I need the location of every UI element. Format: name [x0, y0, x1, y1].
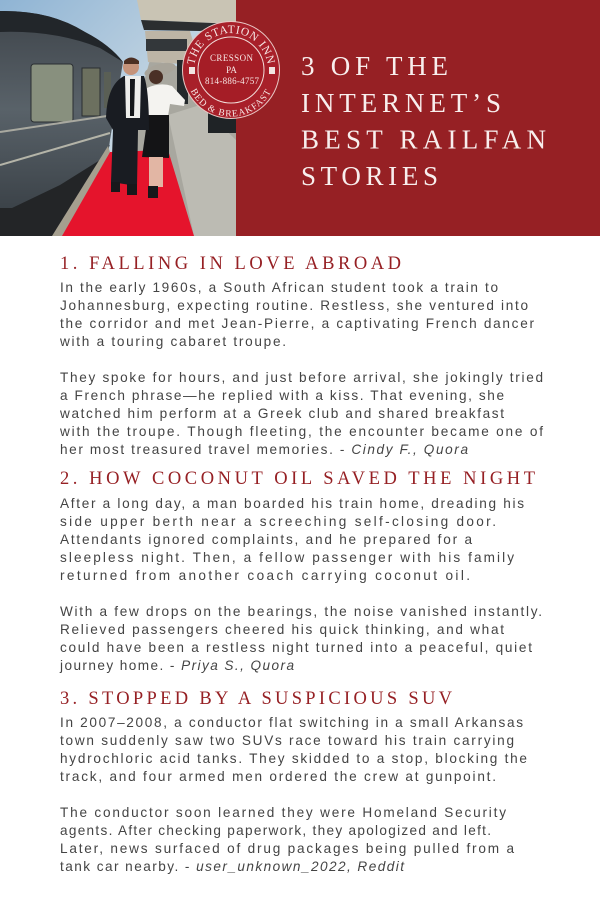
logo seal: The Station Inn [182, 21, 280, 119]
story 1 text: a French phrase—he replied with a kiss. That evening, she [60, 388, 504, 403]
story 2 text: sleepless night. Then, a fellow passenger with his family [60, 550, 514, 565]
platform edge [52, 146, 110, 236]
logo seal: The Station Inn: PA [226, 65, 237, 75]
story 2 heading: 2. HOW COCONUT OIL SAVED THE NIGHT [60, 469, 535, 489]
platform [100, 60, 236, 236]
logo seal: The Station Inn: CRESSON [210, 53, 254, 63]
story 3 text: tank car nearby. - user_unknown_2022, Reddit [60, 859, 405, 874]
train car [0, 11, 123, 208]
story 3 heading: 3. STOPPED BY A SUSPICIOUS SUV [60, 689, 453, 709]
header panel [236, 0, 600, 236]
story 3 text: In 2007–2008, a conductor flat switching in a small Arkansas [60, 715, 523, 730]
red carpet [62, 150, 194, 236]
story 1 heading: 1. FALLING IN LOVE ABROAD [60, 254, 401, 274]
train stripes [0, 116, 107, 132]
story 1 text: They spoke for hours, and just before arrival, she jokingly tried [60, 370, 543, 385]
man [106, 58, 149, 195]
story 1 text: Johannesburg, expecting routine. Restless, she ventured into [60, 298, 528, 313]
story 1 text: with the troupe. Though fleeting, the encounter became one of [59, 424, 543, 439]
title: INTERNET’S [301, 88, 501, 118]
story 2 text [59, 496, 542, 673]
story 2 text: With a few drops on the bearings, the noise vanished instantly. [60, 604, 542, 619]
story 1 text: her most treasured travel memories. - Cindy F., Quora [60, 442, 468, 457]
sky [0, 0, 236, 236]
canopy [137, 0, 236, 24]
story 3 text: Later, news surfaced of drug packages being pulled from a [60, 841, 514, 856]
logo seal: The Station Inn: THE STATION INN [186, 26, 275, 64]
story 2 text: journey home. - Priya S., Quora [59, 658, 294, 673]
story 1 text: the corridor and met Jean-Pierre, a captivating French dancer [60, 316, 534, 331]
train windows [31, 64, 73, 122]
woman [142, 60, 185, 198]
story 2 text: side upper berth near a screeching self-closing door. [60, 514, 496, 529]
story 3 text: town suddenly saw two SUVs race toward his train carrying [60, 733, 514, 748]
story 1 text: with a touring cabaret troupe. [59, 334, 286, 349]
track bed [0, 145, 110, 236]
story 1 text: watched him perform at a Greek club and shared breakfast [59, 406, 504, 421]
title: STORIES [301, 161, 438, 191]
story 1 text [59, 280, 543, 457]
logo seal: The Station Inn: BED & BREAKFAST [190, 88, 270, 117]
story 3 text: The conductor soon learned they were Homeland Security [60, 805, 506, 820]
story 2 text: Attendants ignored complaints, and he prepared for a [60, 532, 472, 547]
story 3 text: agents. After checking paperwork, they apologized and left. [60, 823, 491, 838]
story 2 text: Relieved passengers cheered his quick thinking, and what [60, 622, 504, 637]
photo: couple on red carpet beside train [0, 0, 236, 236]
story 2 text: After a long day, a man boarded his train home, dreading his [60, 496, 524, 511]
title [301, 51, 546, 191]
logo seal: The Station Inn: 814-886-4757 [205, 76, 260, 86]
title: 3 OF THE [301, 51, 448, 81]
story 3 text [60, 715, 527, 874]
support column [177, 60, 188, 104]
story 2 text: returned from another coach carrying coconut oil. [60, 568, 470, 583]
story 3 text: hydrochloric acid tanks. They skidded to a stop, blocking the [60, 751, 527, 766]
story 1 text: In the early 1960s, a South African student took a train to [60, 280, 498, 295]
title: BEST RAILFAN [301, 124, 546, 154]
story 3 text: track, and four armed men ordered the crew at gunpoint. [60, 769, 496, 784]
story 2 text: could have been a restless night turned into a peaceful, quiet [60, 640, 532, 655]
